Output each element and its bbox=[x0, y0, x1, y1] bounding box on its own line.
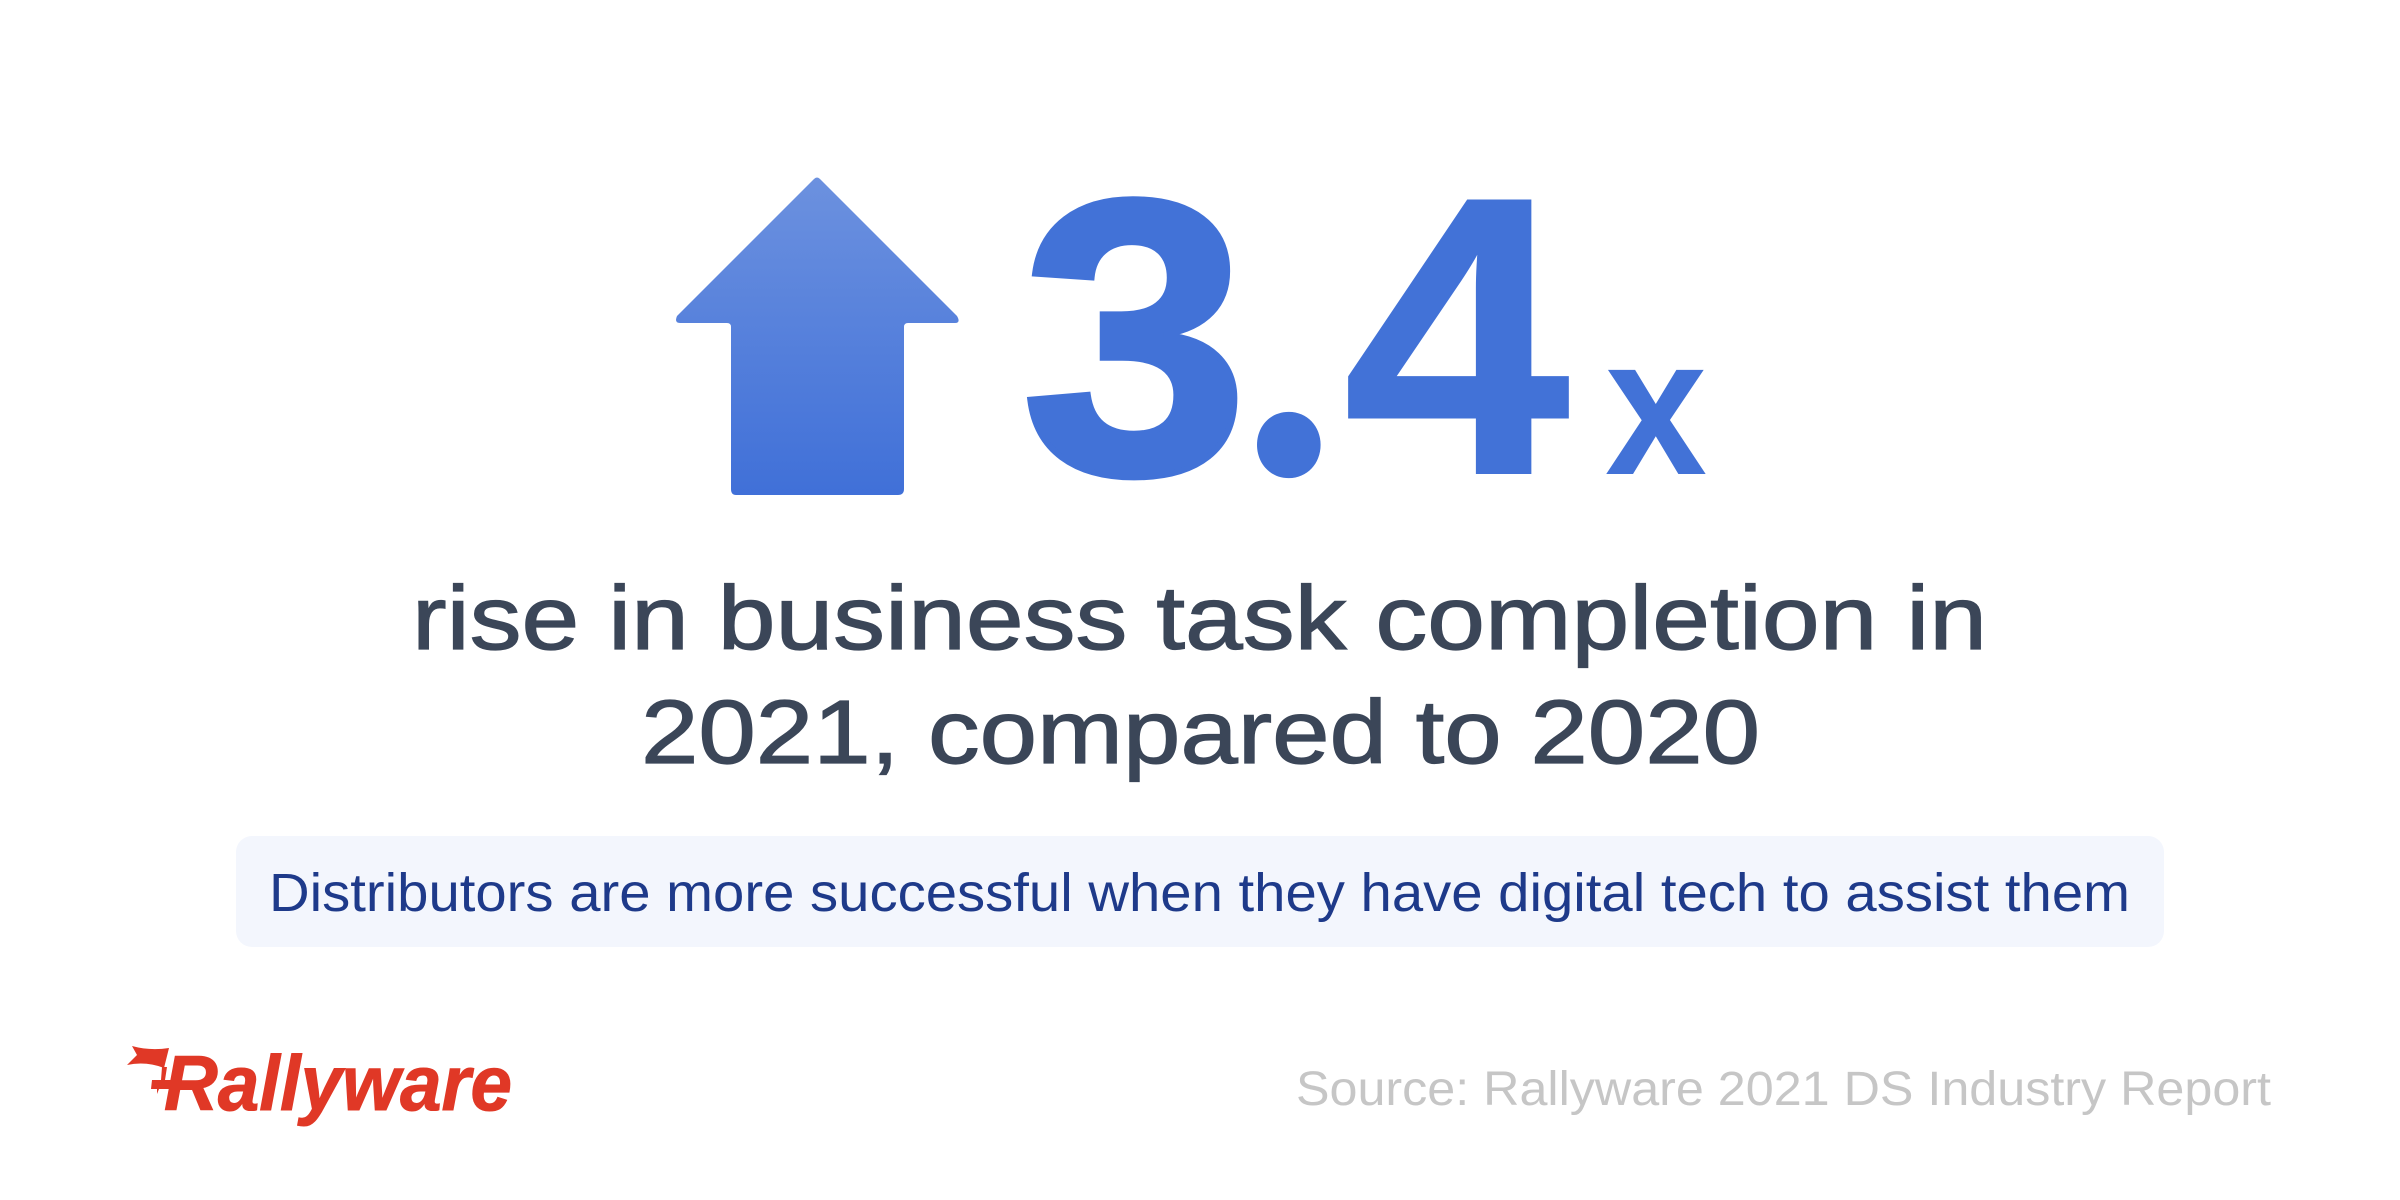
headline figure: 3.4x: 4 bbox=[1343, 115, 1573, 557]
main statement text bbox=[412, 569, 1987, 783]
main statement text: rise in business task completion in bbox=[412, 569, 1987, 669]
headline figure: 3.4x: x bbox=[1605, 296, 1707, 516]
callout: takeaway bbox=[236, 836, 2164, 947]
main statement text: 2021, compared to 2020 bbox=[641, 683, 1760, 783]
headline figure: 3.4x bbox=[1021, 115, 1707, 561]
source note: Source: Rallyware 2021 DS Industry Report bbox=[1296, 1063, 2271, 1116]
logo: Rallyware: Rallyware bbox=[164, 1039, 512, 1127]
headline figure: 3.4x: . bbox=[1236, 127, 1341, 561]
headline figure: 3.4x: 3 bbox=[1021, 119, 1249, 557]
callout: takeaway: Distributors are more successful when they have digital tech to assist them bbox=[269, 863, 2130, 923]
icon: up arrow bbox=[676, 178, 959, 495]
